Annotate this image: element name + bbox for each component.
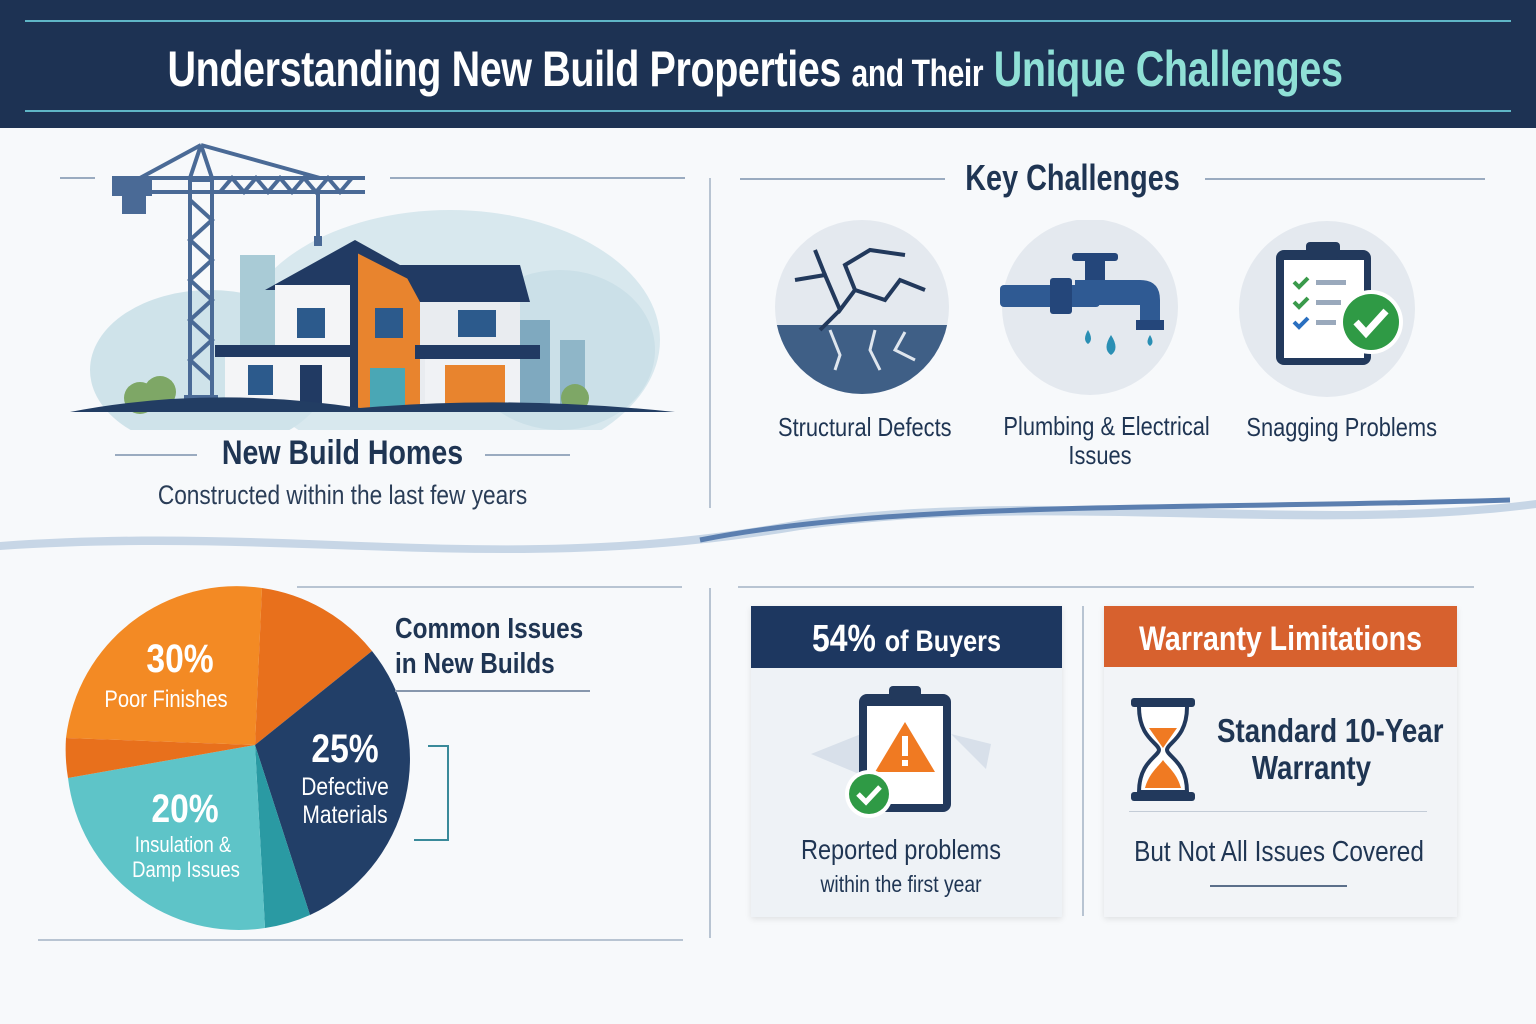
label: Plumbing & Electrical Issues: Plumbing & Electrical: [1003, 411, 1210, 441]
card header: 54% of Buyers: [812, 618, 1001, 660]
pie chart: common issues: Defective: [301, 772, 389, 800]
label: Snagging Problems: Snagging Problems: [1246, 412, 1437, 442]
wave divider: [0, 498, 1536, 553]
pie chart: common issues: Insulation &: [135, 834, 232, 857]
card: 54% of buyers: Reported problems: [801, 834, 1001, 865]
heading: New Build Homes: Constructed within the last few years: [158, 480, 527, 510]
pie chart: common issues: 30%: [146, 636, 214, 681]
card: 54% of buyers: [751, 606, 1062, 917]
house: [265, 240, 445, 290]
icon: warning clipboard: [812, 686, 991, 818]
heading: Common Issues in New Builds: Common Issues: [395, 613, 583, 645]
heading: Key Challenges: Key Challenges: [965, 157, 1180, 198]
title banner: [0, 0, 1536, 128]
heading: Common Issues in New Builds: in New Builds: [395, 648, 555, 680]
card: warranty limitations: But Not All Issues Covered: [1134, 836, 1424, 868]
pie chart: common issues: [66, 586, 449, 930]
heading: New Build Homes: [115, 434, 570, 510]
icon: structural defects: [775, 220, 949, 394]
card: 54% of buyers: within the first year: [820, 871, 982, 897]
pie chart: common issues: 20%: [151, 786, 219, 831]
card header: Warranty Limitations: [1139, 620, 1422, 658]
label: Plumbing & Electrical Issues: Issues: [1068, 440, 1132, 470]
icon: hourglass: [1131, 698, 1195, 801]
heading: New Build Homes: New Build Homes: [222, 434, 463, 472]
heading: Common Issues in New Builds: [395, 613, 590, 692]
pie chart: common issues: Materials: [302, 800, 388, 828]
card: warranty limitations: [1104, 606, 1457, 917]
title text: Understanding New Build Properties and Their Unique Challenges: [167, 41, 1343, 97]
label: Structural Defects: Structural Defects: [778, 412, 952, 442]
illustration: new build house with crane: [60, 143, 685, 430]
pie chart: common issues: Poor Finishes: [104, 685, 228, 712]
card: warranty limitations: Standard 10-Year: [1217, 712, 1443, 749]
card: warranty limitations: Warranty: [1252, 749, 1371, 786]
icon: snagging clipboard: [1239, 221, 1415, 397]
card header: [1104, 606, 1457, 667]
pie chart: common issues: 25%: [311, 726, 379, 771]
pie chart: common issues: Damp Issues: [132, 859, 240, 882]
crane: [112, 145, 365, 400]
icon: plumbing: [1000, 220, 1178, 395]
card header: [751, 606, 1062, 668]
label: Plumbing & Electrical Issues: [1003, 411, 1210, 470]
